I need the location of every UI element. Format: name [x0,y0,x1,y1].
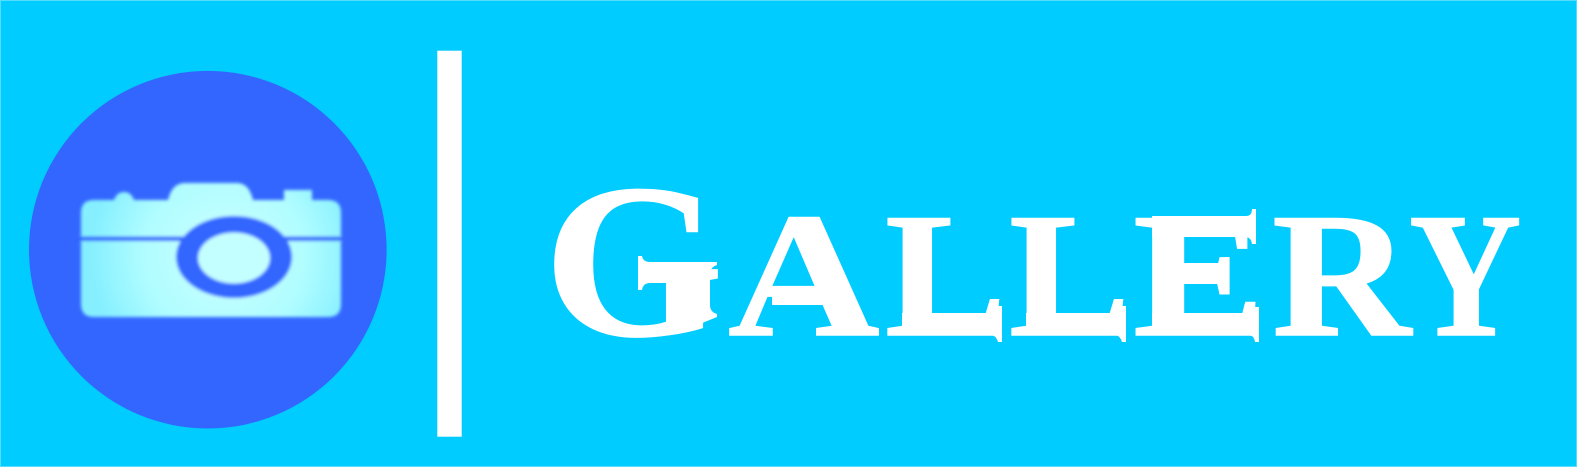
letter Y: Y [1409,177,1521,374]
letter L: L [885,177,1006,374]
title: Gallery [544,139,1521,383]
camera lens ring [176,216,292,298]
icon: camera [78,183,344,317]
vertical divider bar [437,51,462,437]
letter R: R [1272,177,1413,374]
camera lens [198,232,270,284]
letter G: G [544,139,723,383]
circle [29,71,387,428]
letter A: A [728,178,880,374]
camera body [81,183,341,317]
icon: blue circle with camera [29,71,387,428]
camera divider [78,236,344,241]
letter L: L [1009,177,1130,374]
letter E: E [1133,176,1265,374]
